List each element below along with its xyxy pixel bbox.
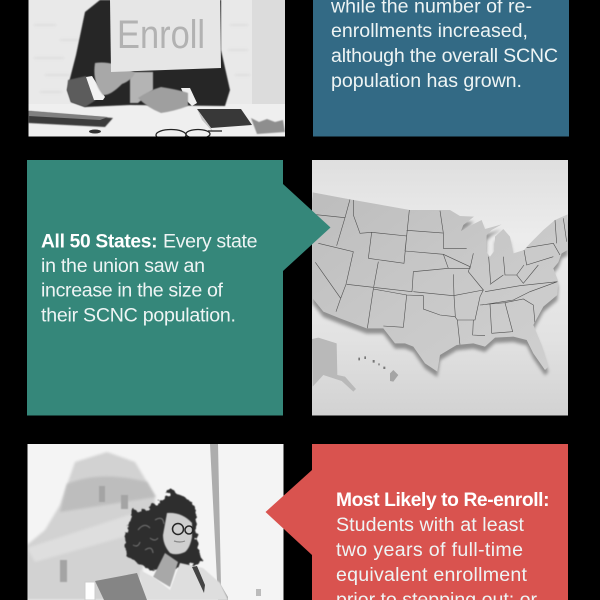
- panel: blue re-enrollment text: [313, 0, 569, 136]
- panel: red most likely to re-enroll callout: Students with at least: [336, 514, 525, 536]
- panel: red most likely to re-enroll callout: two years of full-time: [336, 539, 523, 561]
- panel: teal all 50 states callout: [27, 160, 330, 416]
- panel: teal all 50 states callout: Every state: [163, 230, 258, 252]
- panel: blue re-enrollment text: enrollments increased,: [331, 20, 528, 42]
- state borders: [313, 199, 567, 345]
- lamp post: [210, 444, 228, 600]
- Alaska and Hawaii: [312, 338, 356, 392]
- panel: red most likely to re-enroll callout: equivalent enrollment: [336, 564, 528, 586]
- map drop shadow: [313, 198, 568, 377]
- keyboard: [28, 111, 113, 127]
- businessman suit: [67, 0, 230, 107]
- bag strap: [192, 566, 205, 593]
- panel: blue re-enrollment text: population has grown.: [331, 70, 522, 92]
- face: [163, 513, 192, 554]
- curly hair: [125, 490, 202, 570]
- panel: teal all 50 states callout: in the union saw an: [41, 255, 205, 277]
- shirt and cuffs: [130, 72, 153, 103]
- photo: student with curly hair in front of a building: [27, 444, 284, 600]
- glasses: [172, 524, 193, 534]
- plant: [251, 118, 285, 134]
- hands: [94, 62, 135, 95]
- sign with handwritten word: [110, 0, 221, 72]
- panel: teal all 50 states callout: their SCNC population.: [41, 304, 236, 326]
- blurred domed building: [27, 452, 155, 600]
- contiguous states: [313, 192, 568, 372]
- photo: map of the United States: [312, 160, 568, 416]
- panel: blue re-enrollment text: although the overall SCNC: [331, 45, 558, 67]
- glasses: [155, 128, 222, 136]
- panel: red most likely to re-enroll callout: Most Likely to Re-enroll:: [336, 490, 550, 511]
- notebook: [197, 109, 252, 128]
- panel: red most likely to re-enroll callout: [266, 444, 568, 600]
- panel: teal all 50 states callout: All 50 States:: [41, 231, 158, 252]
- folder: [95, 573, 147, 600]
- blouse: [140, 563, 228, 600]
- photo: businessman holding Enroll sign: [28, 0, 285, 140]
- panel: teal all 50 states callout: increase in the size of: [41, 280, 224, 302]
- photo: businessman holding Enroll sign: Enroll: [117, 13, 205, 57]
- neck: [153, 553, 178, 587]
